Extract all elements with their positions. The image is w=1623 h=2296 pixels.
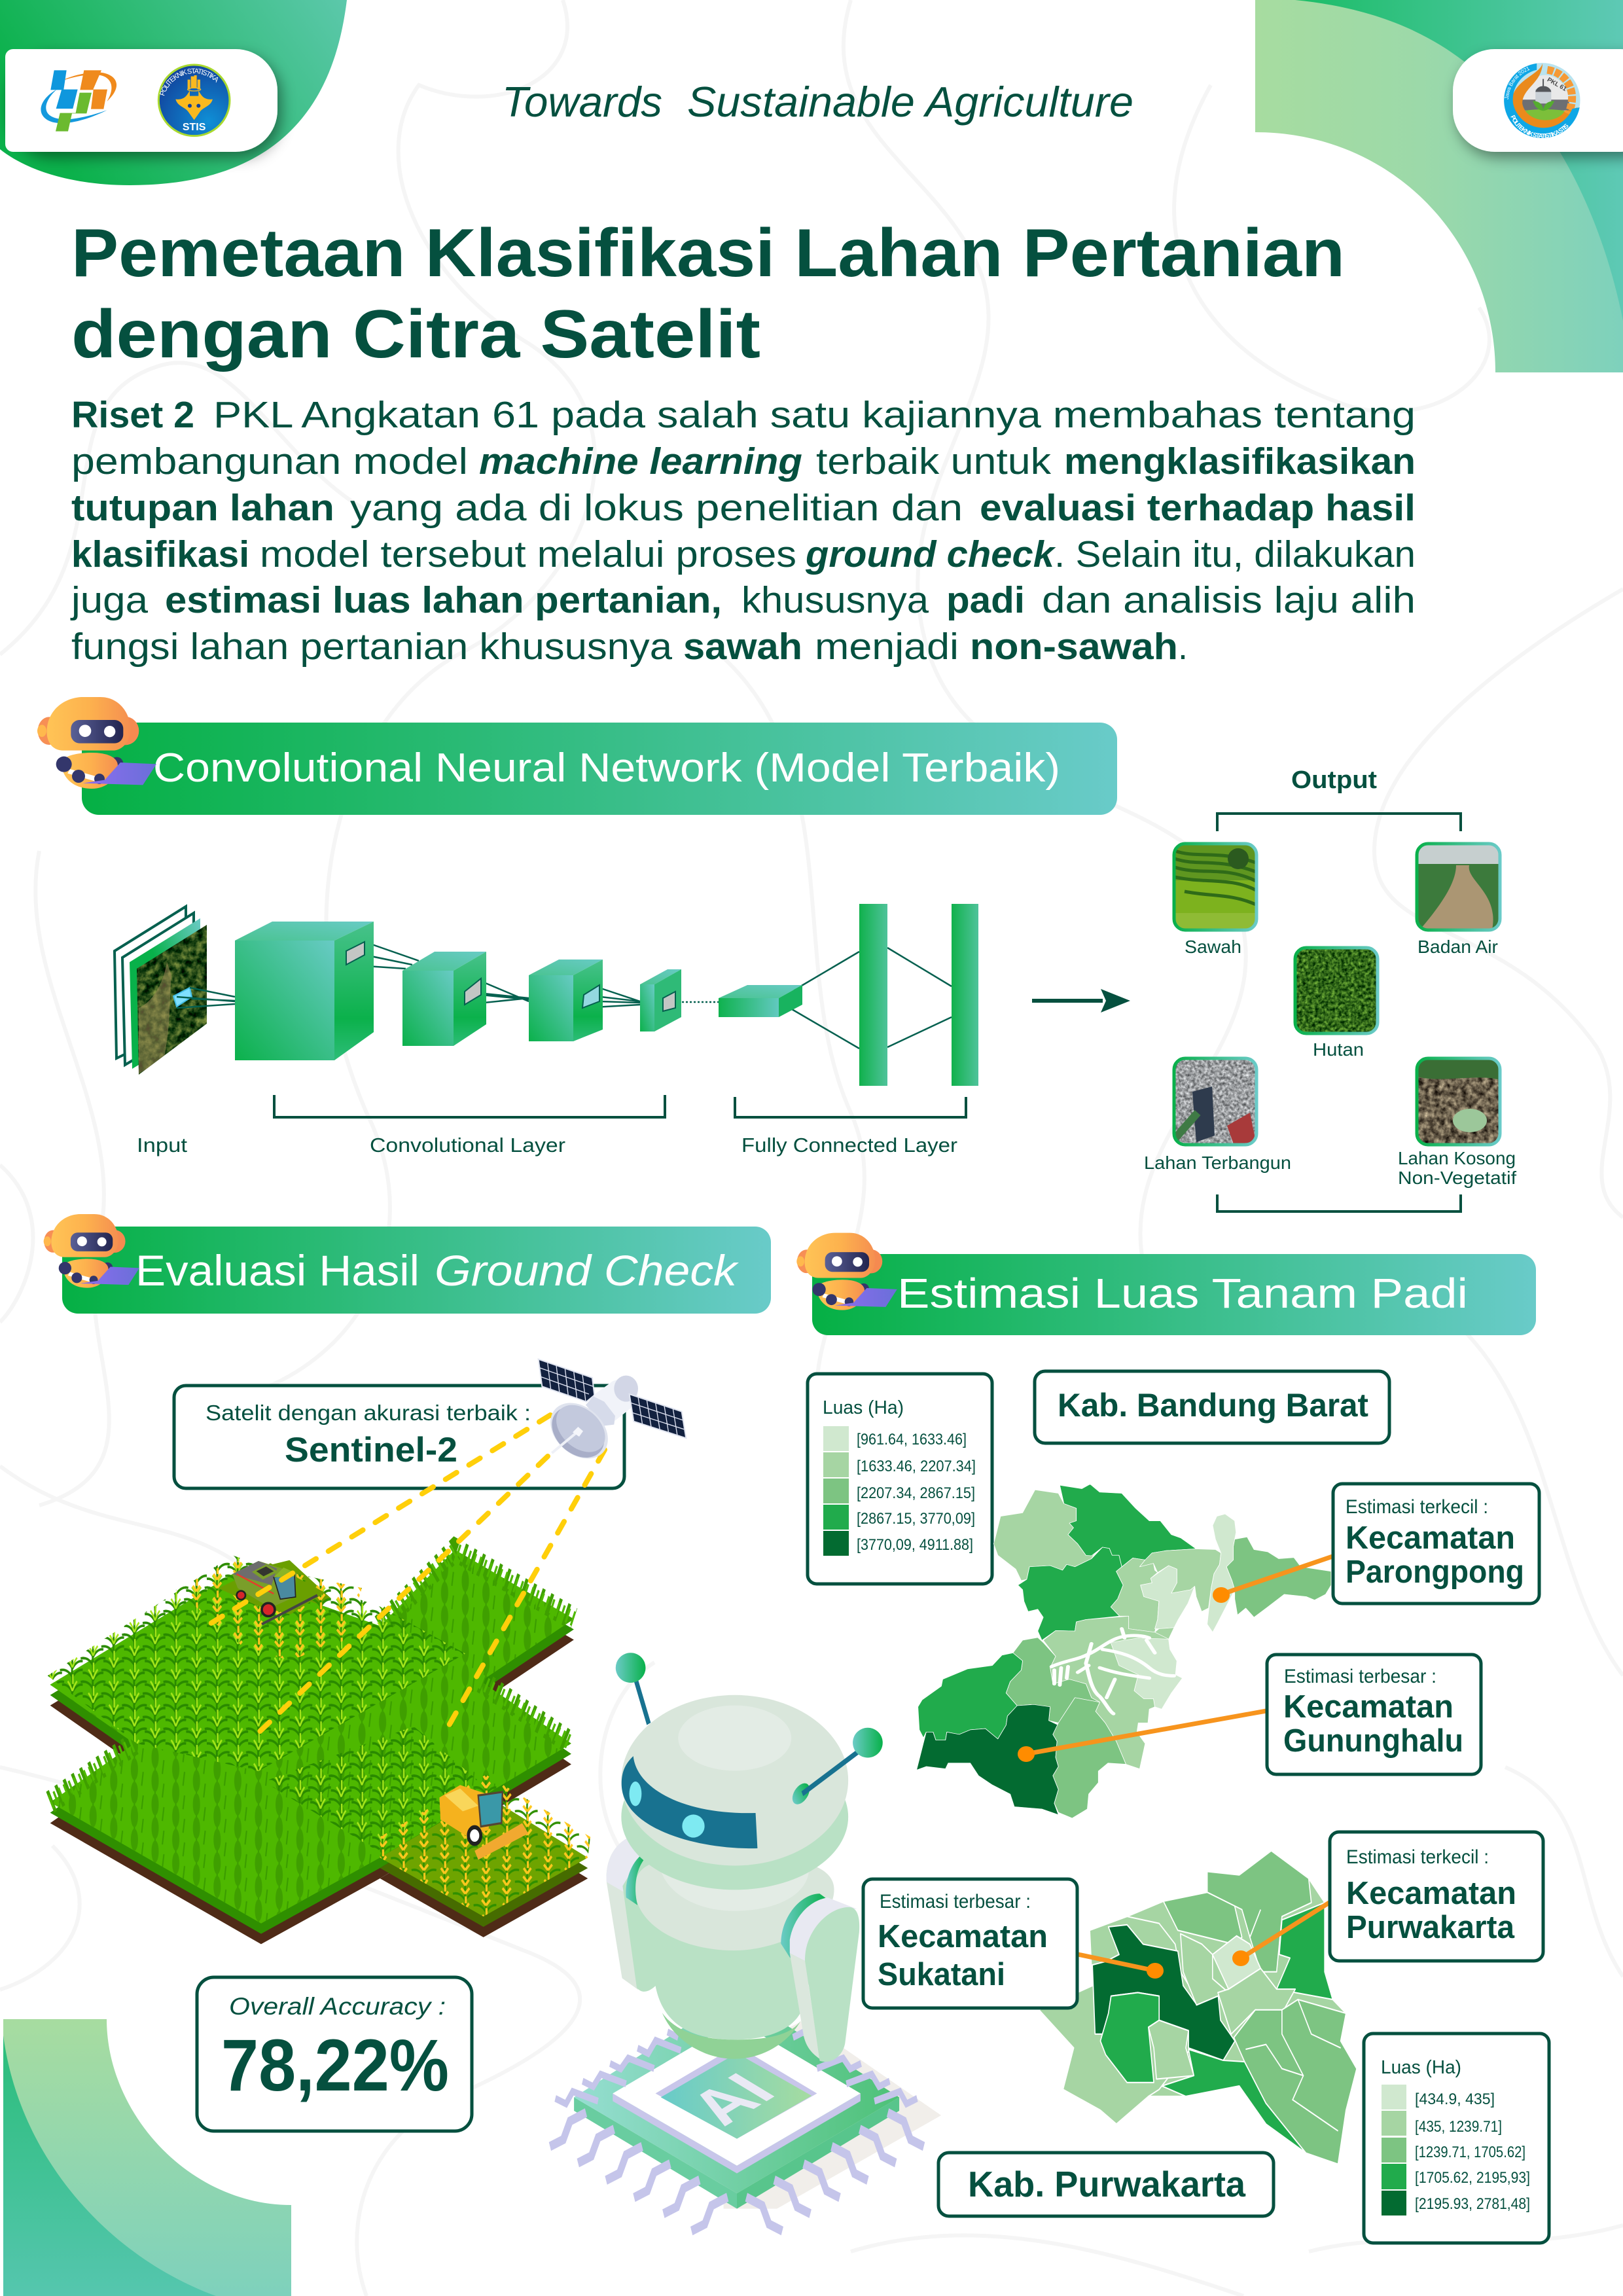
image: lahan kosong — [1417, 1058, 1500, 1145]
icon: STIS logo: STIS — [183, 122, 206, 133]
decoration: bottom-left corner shape — [3, 2019, 291, 2296]
icon: green harvester — [218, 1561, 325, 1624]
legend: Kab. Bandung Barat: [1633.46, 2207.34] — [857, 1458, 976, 1475]
bracket: fully connected layer — [735, 1097, 966, 1117]
intro paragraph: dan analisis laju alih — [1042, 579, 1416, 621]
intro paragraph: padi — [946, 579, 1025, 621]
legend: Kab. Purwakarta: [435, 1239.71] — [1415, 2118, 1502, 2136]
title — [71, 215, 1345, 372]
intro paragraph: . — [1178, 626, 1188, 668]
intro paragraph: pembangunan model — [71, 440, 468, 482]
panel: output classes — [1144, 766, 1516, 1211]
label: lahan terbangun: Lahan Terbangun — [1144, 1153, 1291, 1173]
intro paragraph: . Selain itu, dilakukan — [1054, 533, 1416, 575]
intro paragraph: fungsi lahan pertanian khususnya — [71, 626, 672, 668]
illustration: AI robot on chip — [550, 1653, 941, 2231]
label: lahan kosong non-vegetatif: Non-Vegetatif — [1398, 1168, 1516, 1188]
callout: Parongpong: Estimasi terkecil : — [1346, 1496, 1488, 1518]
legend: Kab. Bandung Barat — [808, 1374, 992, 1584]
input image stack — [115, 906, 207, 1075]
callout: overall accuracy: 78,22% — [221, 2024, 449, 2106]
legend: Kab. Purwakarta: [434.9, 435] — [1415, 2090, 1495, 2108]
legend: Kab. Purwakarta: [1705.62, 2195,93] — [1415, 2169, 1530, 2187]
intro paragraph: PKL Angkatan 61 pada salah satu kajiannya membahas tentang — [213, 394, 1416, 436]
robot arm — [781, 1893, 859, 2062]
callout: Sukatani: Estimasi terbesar : — [880, 1891, 1031, 1912]
logo card right — [1448, 46, 1623, 166]
intro paragraph: juga — [70, 579, 148, 621]
legend: Kab. Bandung Barat: Luas (Ha) — [823, 1397, 904, 1418]
chart: CNN architecture diagram — [115, 904, 1130, 1157]
chip: AI — [673, 2064, 790, 2134]
map: Kab. Purwakarta — [1039, 1851, 1357, 2164]
label: fully connected layer: Fully Connected Layer — [741, 1134, 957, 1157]
intro paragraph: terbaik untuk — [816, 440, 1052, 482]
label: hutan: Hutan — [1313, 1039, 1364, 1060]
icon: PKL 61 logo: POLITEKNIK STATISTIKA STIS — [1510, 115, 1568, 138]
intro paragraph: klasifikasi — [71, 533, 249, 575]
icon: yellow harvester — [439, 1785, 528, 1859]
callout: Purwakarta: Estimasi terkecil : — [1346, 1846, 1489, 1868]
legend: Kab. Bandung Barat: [961.64, 1633.46] — [857, 1431, 967, 1448]
icon: BPS logo — [41, 70, 116, 132]
title: dengan Citra Satelit — [71, 296, 760, 372]
intro paragraph: non-sawah — [970, 626, 1178, 668]
callout: satellite accuracy: Sentinel-2 — [285, 1431, 457, 1469]
illustration: rice field — [48, 1550, 590, 1944]
icon: PKL 61 logo — [1504, 63, 1580, 138]
chip — [550, 1994, 941, 2231]
tagline: Sustainable Agriculture — [687, 78, 1133, 126]
legend: Kab. Purwakarta: [2195.93, 2781,48] — [1415, 2195, 1530, 2213]
icon: PKL 61 logo: Jawa Barat 2021 — [1505, 67, 1530, 99]
intro paragraph — [70, 394, 1416, 668]
callout: Sukatani: Kecamatan — [878, 1919, 1048, 1954]
callout: satellite accuracy: Satelit dengan akurasi terbaik : — [205, 1401, 531, 1425]
icon: PKL 61 logo: PKL 61 — [1546, 76, 1568, 93]
icon: satellite — [539, 1359, 686, 1470]
heading: Evaluasi Hasil Ground Check — [62, 1227, 771, 1314]
callout: Gununghalu: Estimasi terbesar : — [1284, 1666, 1436, 1687]
convolution block 1 — [235, 922, 374, 1060]
robot body — [607, 1836, 834, 2059]
satellite signal lines — [207, 1415, 605, 1738]
callout: Parongpong: Kecamatan — [1346, 1520, 1515, 1556]
logo card left — [1, 46, 290, 168]
label: sawah: Sawah — [1185, 937, 1241, 957]
icon: STIS logo: POLITEKNIK STATISTIKA — [160, 68, 219, 96]
lake — [1052, 1629, 1174, 1713]
label: Kab. Purwakarta — [938, 2153, 1274, 2216]
convolution block 3 — [529, 960, 603, 1041]
image: hutan — [1295, 948, 1378, 1033]
legend: Kab. Bandung Barat: [2867.15, 3770,09] — [857, 1510, 975, 1528]
callout: Parongpong — [1333, 1484, 1539, 1604]
label: badan air: Badan Air — [1418, 937, 1498, 957]
callout: satellite accuracy — [174, 1386, 624, 1488]
intro paragraph: machine learning — [479, 440, 802, 482]
bracket: output bottom — [1217, 1194, 1461, 1211]
callout: Gununghalu: Gununghalu — [1283, 1723, 1463, 1759]
map pointer: Parongpong — [1213, 1556, 1332, 1603]
callout: Gununghalu — [1267, 1655, 1481, 1774]
map pointer: Purwakarta — [1232, 1903, 1329, 1966]
image: sawah — [1174, 844, 1257, 930]
label: Kab. Bandung Barat: Kab. Bandung Barat — [1058, 1387, 1368, 1424]
icon: STIS logo — [157, 64, 230, 137]
label: lahan kosong non-vegetatif: Lahan Kosong — [1398, 1148, 1516, 1168]
convolution connection lines — [177, 942, 952, 1049]
image: lahan terbangun — [1174, 1058, 1257, 1145]
decoration: top-left corner shape — [0, 0, 347, 185]
intro paragraph: khususnya — [741, 579, 929, 621]
callout: Purwakarta: Purwakarta — [1346, 1910, 1515, 1945]
callout: Parongpong: Parongpong — [1346, 1554, 1524, 1590]
decoration: top-right corner shape — [1255, 0, 1623, 372]
heading: Convolutional Neural Network: Convolutional Neural Network (Model Terbaik) — [153, 745, 1060, 791]
heading: Evaluasi Hasil Ground Check: Evaluasi Hasil — [135, 1246, 419, 1295]
intro paragraph: estimasi luas lahan pertanian, — [165, 579, 722, 621]
title: Pemetaan Klasifikasi Lahan Pertanian — [71, 215, 1345, 291]
map pointer: Gununghalu — [1018, 1711, 1266, 1762]
callout: overall accuracy: Overall Accuracy : — [229, 1993, 446, 2020]
callout: Gununghalu: Kecamatan — [1283, 1689, 1454, 1725]
icon: robot mascot 1 — [37, 697, 156, 789]
callout: Sukatani: Sukatani — [878, 1957, 1005, 1992]
tagline — [502, 78, 1133, 126]
heading: Evaluasi Hasil Ground Check: Ground Check — [435, 1246, 739, 1295]
label: Kab. Purwakarta: Kab. Purwakarta — [968, 2164, 1245, 2204]
robot head — [616, 1653, 883, 1890]
label: output: Output — [1291, 766, 1377, 794]
bracket: convolutional layer — [274, 1095, 665, 1117]
callout: overall accuracy — [197, 1977, 472, 2131]
intro paragraph: sawah — [683, 626, 802, 668]
fully connected bars — [859, 904, 978, 1086]
callout: Sukatani — [863, 1879, 1077, 2008]
intro paragraph: yang ada di lokus penelitian dan — [350, 487, 963, 529]
convolution block 4 — [640, 969, 681, 1031]
legend: Kab. Purwakarta: Luas (Ha) — [1381, 2057, 1461, 2078]
intro paragraph: tutupan lahan — [71, 487, 334, 529]
image: badan air — [1417, 844, 1500, 930]
intro paragraph: model tersebut melalui proses — [260, 533, 796, 575]
flatten block — [719, 985, 802, 1017]
icon: robot mascot 3 — [796, 1233, 897, 1310]
arrow — [1032, 989, 1130, 1013]
intro paragraph: menjadi — [815, 626, 959, 668]
intro paragraph: evaluasi terhadap hasil — [980, 487, 1416, 529]
tagline: Towards — [502, 78, 662, 126]
heading: Convolutional Neural Network — [82, 723, 1117, 815]
heading: Estimasi Luas Tanam Padi: Estimasi Luas Tanam Padi — [897, 1270, 1468, 1317]
legend: Kab. Bandung Barat: [2207.34, 2867.15] — [857, 1484, 975, 1502]
legend: Kab. Purwakarta — [1364, 2034, 1549, 2243]
label: Kab. Bandung Barat — [1035, 1371, 1389, 1443]
label: lahan kosong non-vegetatif — [1398, 1148, 1516, 1188]
intro paragraph: Riset 2 — [71, 394, 194, 436]
legend: Kab. Bandung Barat: [3770,09, 4911.88] — [857, 1536, 973, 1554]
intro paragraph: ground check — [805, 533, 1056, 575]
label: input: Input — [137, 1134, 187, 1157]
icon: robot mascot 2 — [44, 1214, 139, 1288]
legend: Kab. Purwakarta: [1239.71, 1705.62] — [1415, 2144, 1525, 2161]
label: convolutional layer: Convolutional Layer — [370, 1134, 565, 1157]
intro paragraph: mengklasifikasikan — [1064, 440, 1416, 482]
map: Kab. Bandung Barat — [917, 1484, 1331, 1818]
callout: Purwakarta — [1330, 1832, 1543, 1961]
bracket: output top — [1217, 814, 1461, 831]
map pointer: Sukatani — [1078, 1954, 1164, 1979]
convolution block 2 — [402, 952, 486, 1046]
callout: Purwakarta: Kecamatan — [1346, 1876, 1516, 1911]
heading: Estimasi Luas Tanam Padi — [812, 1254, 1536, 1335]
